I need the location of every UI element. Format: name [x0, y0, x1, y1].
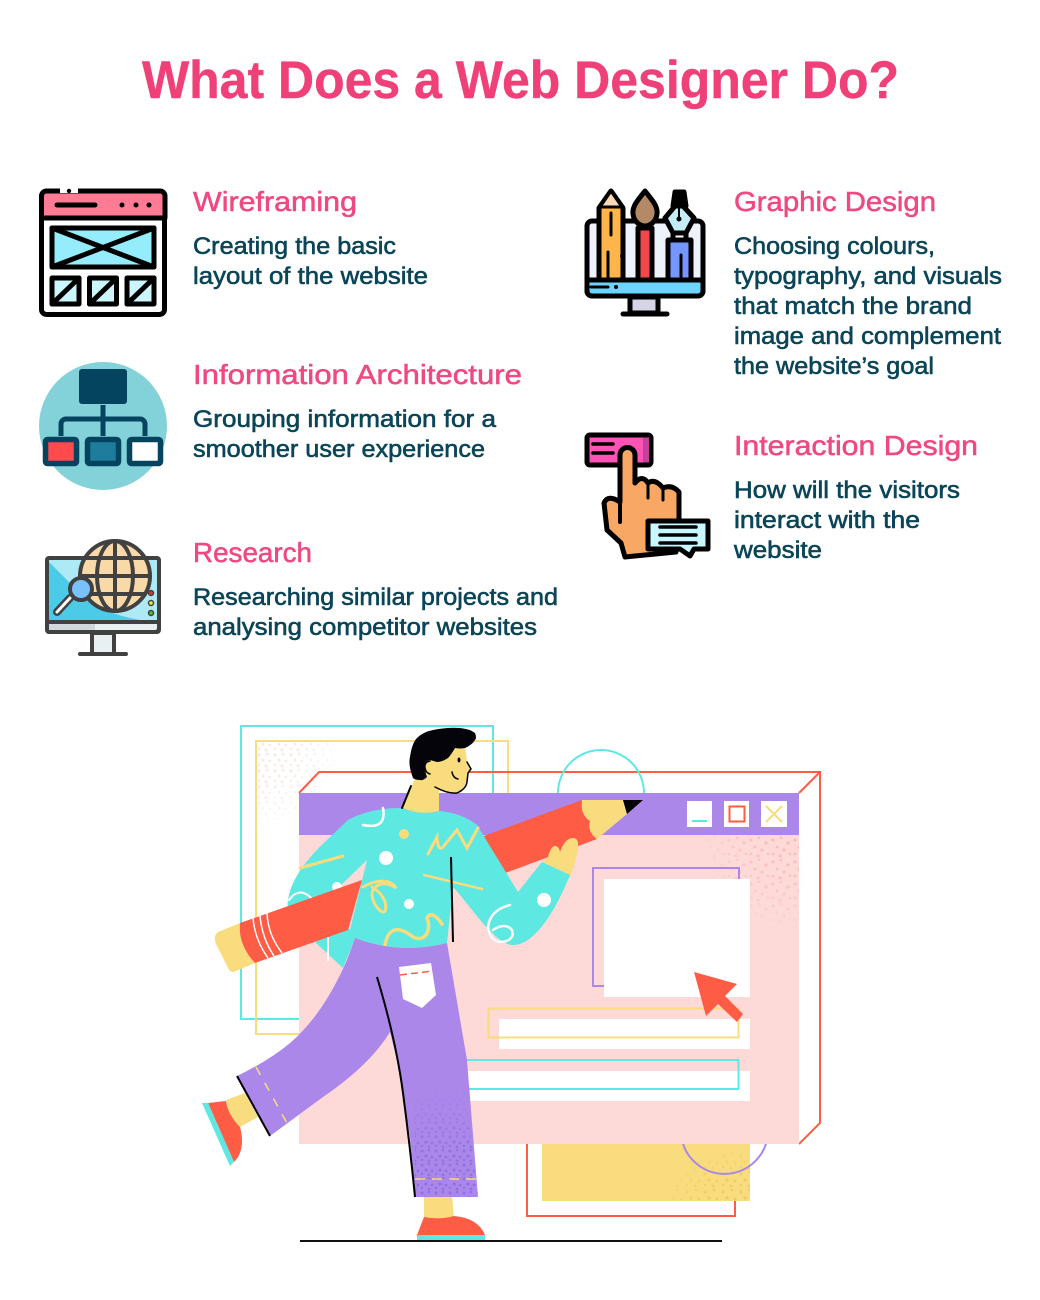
text: graphic design description: Choosing colours,	[734, 233, 935, 260]
text: graphic design description: image and complement	[734, 323, 1001, 350]
heading: graphic design: Graphic Design	[734, 186, 936, 217]
illustration: designer with giant pencil and browser window	[202, 726, 820, 1240]
text: research description: analysing competitor websites	[193, 614, 537, 641]
content card	[593, 868, 750, 997]
icon: design tools on monitor	[587, 191, 703, 314]
text: interaction design description: How will the visitors	[734, 477, 960, 504]
text: graphic design description: the website’s goal	[734, 353, 934, 380]
front foot	[417, 1195, 485, 1240]
trousers	[237, 938, 478, 1197]
window button: minimise	[687, 801, 712, 827]
hand	[499, 838, 578, 877]
text: wireframing description: layout of the website	[193, 263, 428, 290]
icon: monitor with globe and magnifier	[47, 541, 159, 654]
sweater pattern	[289, 808, 551, 960]
window button: close	[761, 801, 787, 827]
content bar two	[450, 1060, 750, 1101]
title: What Does a Web Designer Do?	[142, 51, 899, 110]
pencil rear half with eraser	[215, 880, 362, 972]
icon: hand tapping button	[587, 435, 708, 557]
text: interaction design description: website	[733, 537, 822, 564]
text: graphic design description: typography, and visuals	[734, 263, 1002, 290]
text: interaction design description	[733, 477, 960, 564]
ground line	[300, 1240, 722, 1242]
text: information architecture description	[193, 406, 496, 463]
text: wireframing description	[193, 233, 428, 290]
text: wireframing description: Creating the basic	[193, 233, 396, 260]
icon: cursor arrow	[694, 972, 743, 1022]
background outlined frames	[241, 726, 820, 1216]
text: graphic design description: that match the brand	[734, 293, 972, 320]
sweater	[288, 808, 570, 968]
text: graphic design description	[734, 233, 1002, 380]
text: interaction design description: interact with the	[734, 507, 920, 534]
panel: wireframing	[42, 186, 428, 314]
heading: information architecture: Information Architecture	[193, 359, 522, 390]
back foot	[202, 1093, 258, 1166]
text: information architecture description: Grouping information for a	[193, 406, 496, 433]
text: research description: Researching similar projects and	[193, 584, 558, 611]
text: information architecture description: smoother user experience	[193, 436, 485, 463]
panel: information architecture	[39, 359, 522, 490]
panel: graphic design	[587, 186, 1002, 380]
heading: research: Research	[193, 537, 312, 568]
text: research description	[193, 584, 558, 641]
heading: interaction design: Interaction Design	[734, 430, 978, 461]
icon: wireframe browser window	[42, 187, 165, 314]
panel: research	[47, 537, 558, 654]
head	[402, 728, 476, 813]
yellow block below window	[542, 1140, 767, 1201]
pocket	[399, 963, 436, 1008]
icon: sitemap hierarchy	[39, 362, 167, 490]
content bar one	[488, 1008, 750, 1049]
window button: maximise	[724, 801, 749, 827]
heading: wireframing: Wireframing	[193, 186, 357, 217]
trouser seams	[237, 977, 478, 1197]
panel: interaction design	[587, 430, 978, 564]
legs and trousers	[202, 938, 485, 1240]
pencil front half	[470, 800, 643, 875]
browser window	[299, 793, 799, 1144]
